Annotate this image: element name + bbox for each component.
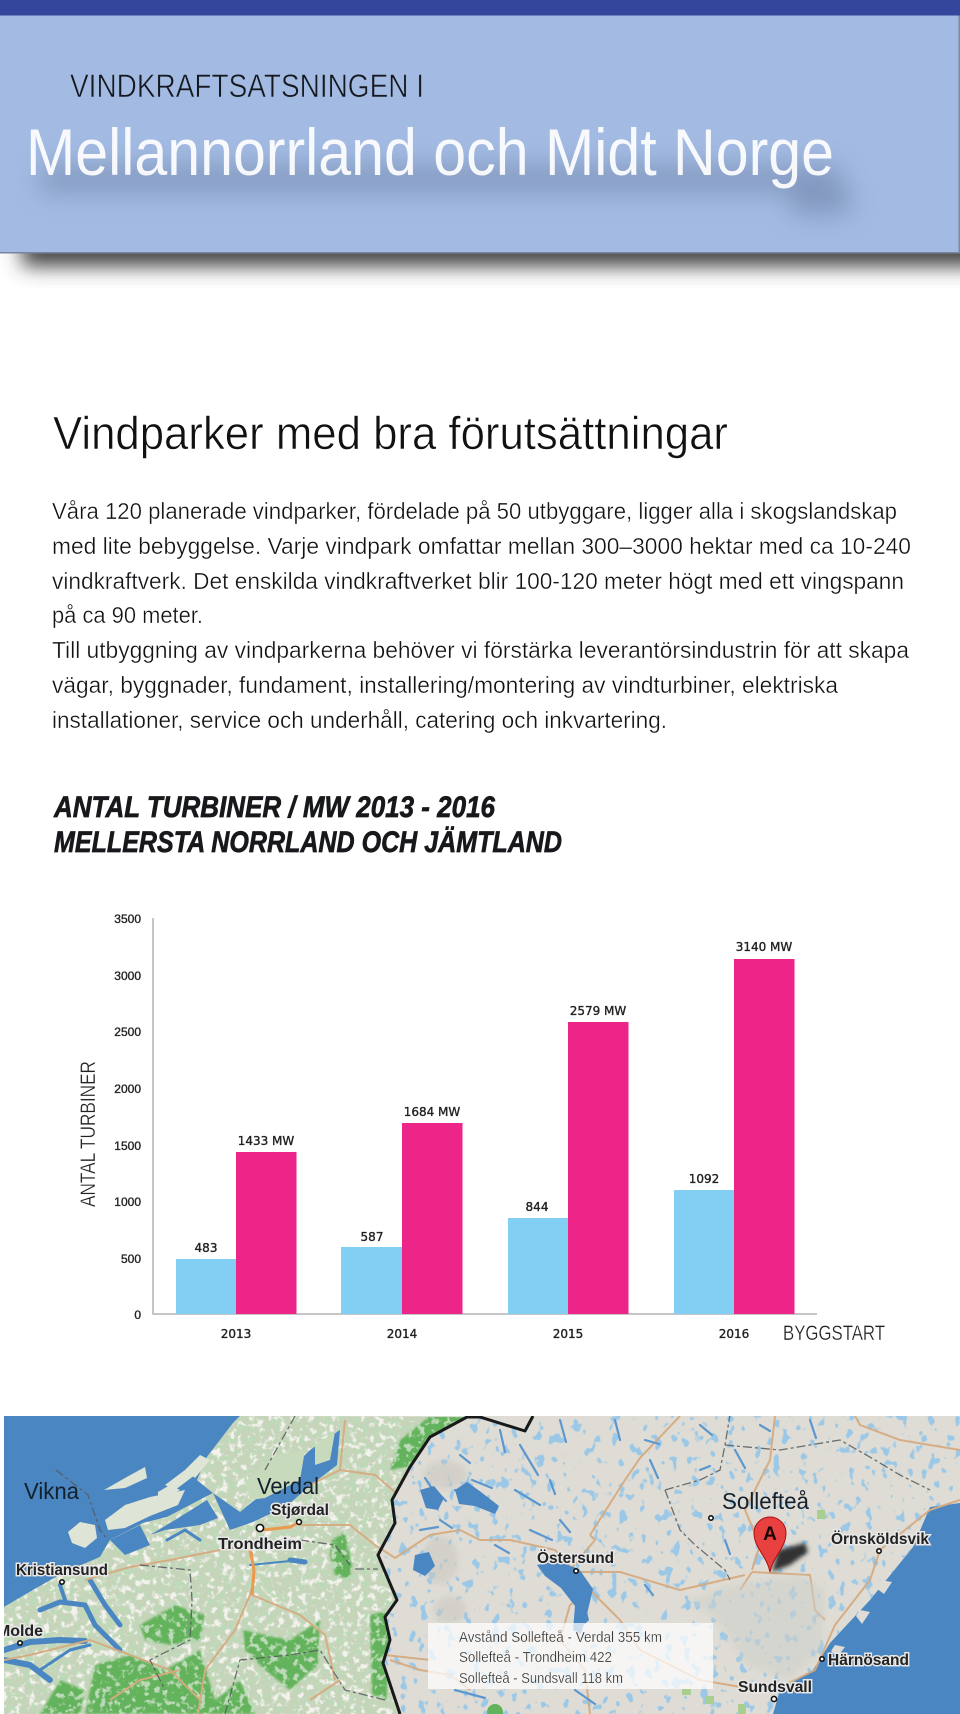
map roads	[4, 1416, 960, 1714]
x axis label: BYGGSTART	[783, 1322, 885, 1345]
header eyebrow: VINDKRAFTSATSNINGEN I	[70, 68, 424, 104]
y axis ticks	[114, 912, 141, 1322]
bars 2013	[176, 1134, 296, 1341]
bars 2014	[341, 1105, 462, 1341]
section heading: Vindparker med bra förutsättningar	[53, 407, 728, 459]
icon: map pin	[754, 1517, 808, 1572]
map Sweden mottling	[422, 1461, 467, 1624]
bars 2016: 3140 MW	[736, 940, 792, 954]
map orange highway	[250, 1523, 298, 1595]
body text: med lite bebyggelse. Varje vindpark omfattar mellan 300–3000 hektar med ca 10-240	[52, 533, 911, 559]
label: Stjørdal: Stjørdal	[271, 1502, 329, 1519]
bars 2016	[674, 940, 794, 1341]
map small greens	[487, 1510, 825, 1714]
label: Sundsvall: Sundsvall	[738, 1679, 812, 1696]
y axis ticks: 1500	[114, 1139, 141, 1153]
y axis ticks: 2500	[114, 1025, 141, 1039]
body text: vägar, byggnader, fundament, installering/montering av vindturbiner, elektriska	[52, 672, 839, 698]
bars 2013: 2013	[221, 1327, 251, 1341]
map secondary borders	[56, 1415, 930, 1714]
bars 2013: 1433 MW	[238, 1134, 294, 1148]
bars 2015	[508, 1004, 628, 1341]
map land peninsula patches	[245, 1432, 335, 1500]
label: Vikna: Vikna	[24, 1478, 79, 1504]
bars 2015: 844	[526, 1200, 548, 1214]
y axis ticks: 1000	[114, 1195, 141, 1209]
body text: Till utbyggning av vindparkerna behöver vi förstärka leverantörsindustrin för att skapa	[52, 637, 910, 663]
bars 2016: 2016	[719, 1327, 749, 1341]
map Sweden lakes noise	[380, 1416, 960, 1714]
y axis ticks: 3500	[114, 912, 141, 926]
callout: distances	[428, 1623, 713, 1689]
body text	[52, 498, 911, 733]
bars 2014: 2014	[387, 1327, 417, 1341]
axes	[153, 918, 817, 1314]
icon: map pin: A	[763, 1524, 777, 1545]
map coast details	[831, 1546, 911, 1654]
label: Trondheim: Trondheim	[218, 1536, 302, 1553]
bars 2014: 1684 MW	[404, 1105, 460, 1119]
bars 2015: 2015	[553, 1327, 583, 1341]
label: Örnsköldsvik: Örnsköldsvik	[831, 1531, 929, 1548]
chart heading: ANTAL TURBINER / MW 2013 - 2016	[53, 791, 495, 824]
map sea	[4, 1416, 960, 1714]
body text: på ca 90 meter.	[52, 602, 203, 628]
callout: distances: Sollefteå - Trondheim 422	[459, 1649, 612, 1666]
callout: distances: Sollefteå - Sundsvall 118 km	[459, 1670, 623, 1687]
bars 2015: 2579 MW	[570, 1004, 626, 1018]
map fjords	[110, 1430, 340, 1555]
header title: Mellannorrland och Midt Norge	[26, 115, 834, 189]
bars 2013: 483	[195, 1241, 217, 1255]
label: Sollefteå: Sollefteå	[722, 1488, 809, 1514]
chart heading	[53, 791, 562, 859]
map Swedish lakes	[420, 1420, 816, 1704]
label: Kristiansund: Kristiansund	[16, 1562, 108, 1579]
y axis ticks: 0	[134, 1308, 141, 1322]
y axis ticks: 3000	[114, 969, 141, 983]
label: Verdal: Verdal	[257, 1473, 319, 1499]
map	[0, 1415, 960, 1714]
bar chart	[77, 912, 885, 1345]
label: Härnösand: Härnösand	[828, 1652, 909, 1669]
body text: Våra 120 planerade vindparker, fördelade på 50 utbyggare, ligger alla i skogslandskap	[52, 498, 897, 524]
map fjord lines	[4, 1530, 305, 1680]
body text: vindkraftverk. Det enskilda vindkraftverket blir 100-120 meter högt med ett vingspann	[52, 568, 904, 594]
y axis label: ANTAL TURBINER	[77, 1061, 100, 1207]
chart heading: MELLERSTA NORRLAND OCH JÄMTLAND	[54, 826, 562, 859]
map islands	[68, 1455, 210, 1548]
map Norway terrain	[4, 1416, 480, 1714]
map national border	[378, 1416, 533, 1714]
map place markers	[18, 1516, 881, 1702]
y axis ticks: 500	[121, 1252, 141, 1266]
bars 2016: 1092	[689, 1172, 719, 1186]
map blurred grey patch	[690, 1575, 825, 1680]
label: Östersund: Östersund	[537, 1550, 614, 1567]
body text: installationer, service och underhåll, catering och inkvartering.	[52, 707, 667, 733]
header banner	[0, 0, 960, 266]
y axis ticks: 2000	[114, 1082, 141, 1096]
callout: distances: Avstånd Sollefteå - Verdal 355 km	[459, 1629, 662, 1646]
map land	[4, 1416, 960, 1714]
map large lakes	[413, 1482, 593, 1634]
bars 2014: 587	[361, 1230, 383, 1244]
